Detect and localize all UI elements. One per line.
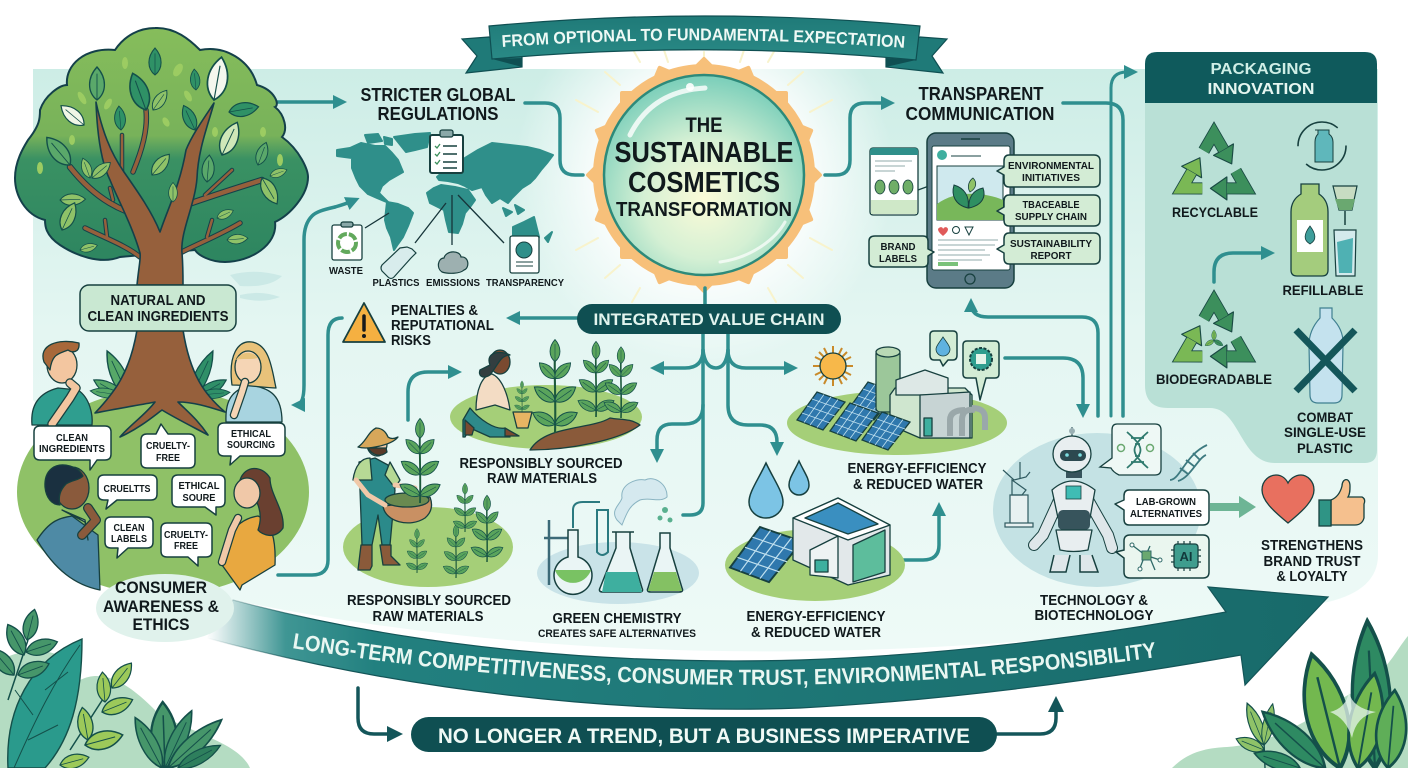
bubble: sustainability report (997, 233, 1100, 264)
caption: GREEN CHEMISTRY (552, 611, 682, 627)
tree leaves (41, 48, 288, 254)
speech bubble: clean ingredients (34, 426, 111, 470)
title: COSMETICS (628, 167, 780, 199)
caption: RAW MATERIALS (372, 609, 484, 625)
biodegradable label: BIODEGRADABLE (1156, 372, 1272, 387)
speech bubble: clean labels: CLEAN (114, 522, 144, 534)
speech bubble: cruelty-free second: FREE (174, 540, 198, 552)
tree crown (15, 28, 308, 262)
person planting (463, 350, 532, 437)
bubble: brand labels: BRAND (880, 241, 916, 253)
bubble: lab-grown: ALTERNATIVES (1130, 508, 1202, 520)
speech bubble: cruelty-free: FREE (156, 452, 180, 464)
bubble: environmental initiatives (997, 155, 1100, 187)
packaging header: INNOVATION (1208, 81, 1314, 98)
small screen (870, 148, 929, 215)
icon: sun (813, 346, 853, 386)
heading: COMMUNICATION (906, 104, 1054, 124)
caption: ENERGY-EFFICIENCY (746, 609, 886, 625)
consumer awareness label: ETHICS (132, 615, 190, 634)
map leader lines (365, 195, 504, 245)
packaging header: PACKAGING (1210, 61, 1312, 78)
person: man in blue sweater (37, 465, 100, 590)
person: woman in yellow (222, 468, 283, 590)
recyclable label: RECYCLABLE (1172, 205, 1258, 220)
bubble: lab-grown: LAB-GROWN (1136, 496, 1196, 508)
speech bubble: clean labels (105, 517, 153, 558)
caption (1034, 593, 1154, 624)
world map (337, 133, 553, 250)
arrow: biodegradable to refillable (1214, 253, 1270, 282)
icon: clipboard checklist (430, 130, 463, 173)
planting scene (450, 340, 642, 487)
building (793, 498, 890, 585)
speech bubble: clean labels: LABELS (111, 533, 147, 545)
bubble: dna (1100, 424, 1161, 475)
icon: emissions (426, 252, 480, 289)
bubble: water (930, 331, 957, 366)
icon: loop bottle (1298, 122, 1346, 170)
label (1261, 538, 1363, 585)
label: natural and clean ingredients: CLEAN INGREDIENTS (88, 309, 229, 325)
icon: transparency (486, 236, 564, 289)
bubble: traceable supply chain (997, 195, 1100, 226)
integrated value chain pill: INTEGRATED VALUE CHAIN (594, 310, 824, 329)
icon: waste (329, 222, 363, 277)
caption: RESPONSIBLY SOURCED (347, 593, 511, 609)
icon: warning (343, 303, 385, 342)
imperative pill with arrows (358, 688, 1056, 752)
connector arrows (276, 72, 1133, 575)
caption: & REDUCED WATER (853, 477, 983, 493)
speech bubble: cruelty-free second: CRUELTY- (164, 529, 208, 541)
heading (906, 84, 1054, 124)
caption: RAW MATERIALS (487, 471, 597, 487)
sun with rays and orb title (514, 0, 894, 365)
speech bubble: cruelts: CRUELTTS (104, 483, 150, 495)
speech bubble: clean ingredients: CLEAN (56, 432, 88, 444)
label: & LOYALTY (1276, 569, 1348, 585)
caption (460, 456, 622, 487)
consumer awareness label: CONSUMER (115, 578, 207, 597)
arrow: lab-grown to trust (1210, 496, 1256, 518)
speech bubble: cruelty-free (141, 424, 195, 468)
packaging header (1145, 52, 1377, 103)
top banner (460, 15, 948, 74)
bubble: brand labels (869, 236, 934, 267)
label: natural and clean ingredients: NATURAL AND (110, 293, 206, 309)
title: SUSTAINABLE (614, 137, 794, 169)
bubble: environmental initiatives: ENVIRONMENTAL (1008, 160, 1095, 172)
caption: ENERGY-EFFICIENCY (848, 461, 987, 477)
bubble: traceable supply chain: TBACEABLE (1022, 199, 1080, 211)
combat label: SINGLE-USE (1284, 425, 1366, 440)
heading (360, 85, 516, 124)
penalties block: PENALTIES & (391, 303, 478, 319)
imperative text: NO LONGER A TREND, BUT A BUSINESS IMPERATIVE (438, 725, 970, 748)
icon: crossed plastic bottle (1296, 308, 1355, 403)
icon: heart (1262, 475, 1314, 523)
person: man in teal shirt (32, 341, 92, 425)
icon: recyclable (1172, 133, 1251, 205)
caption (538, 611, 696, 640)
speech bubble: ethical sourcing (218, 423, 285, 465)
icon: plastics: PLASTICS (372, 277, 420, 289)
panel: technology and biotechnology (993, 424, 1256, 624)
combat label: COMBAT (1297, 410, 1354, 425)
speech bubble: cruelts (98, 475, 157, 509)
person: blonde woman (226, 342, 282, 422)
speech bubble: cruelty-free: CRUELTY- (146, 440, 190, 452)
speech bubble: ethical soure: SOURE (182, 492, 216, 504)
integrated value chain pill (577, 304, 841, 334)
water and building scene (725, 461, 905, 641)
tree trunk and main limbs (96, 102, 214, 285)
icon: emissions: EMISSIONS (426, 277, 480, 289)
speech bubble: clean ingredients: INGREDIENTS (39, 443, 105, 455)
caption (347, 593, 511, 625)
bushes beside trunk (90, 348, 230, 403)
label: natural and clean ingredients (80, 285, 236, 331)
foliage: bottom left (0, 608, 250, 768)
trunk base with roots (95, 330, 225, 437)
panel: consumer awareness (17, 285, 309, 642)
caption: BIOTECHNOLOGY (1034, 608, 1154, 624)
factory scene (787, 331, 1007, 493)
penalties block (343, 303, 494, 349)
icon: biodegradable (1172, 301, 1251, 373)
packaging panel (1145, 52, 1377, 463)
bubble: sustainability report: REPORT (1030, 250, 1072, 262)
panel: stricter regulations (329, 85, 564, 289)
speech bubble: ethical soure: ETHICAL (178, 480, 220, 492)
combat label: PLASTIC (1297, 441, 1353, 456)
title: THE (686, 114, 722, 137)
farmer (353, 428, 432, 570)
combat label (1284, 410, 1366, 456)
icon: transparency: TRANSPARENCY (486, 277, 564, 289)
heading: STRICTER GLOBAL (360, 85, 516, 105)
speech bubble: cruelty-free second (161, 523, 212, 566)
farmer scene (343, 418, 513, 625)
bubble: traceable supply chain: SUPPLY CHAIN (1015, 211, 1087, 223)
icon: thumbs up (1319, 480, 1365, 526)
factory (848, 347, 985, 438)
caption: CREATES SAFE ALTERNATIVES (538, 628, 696, 640)
caption: & REDUCED WATER (751, 625, 881, 641)
banner text: FROM OPTIONAL TO FUNDAMENTAL EXPECTATION (502, 28, 904, 48)
panel: transparent communication (869, 84, 1100, 288)
icon: plastics (372, 247, 420, 289)
steam cloud (615, 479, 667, 525)
icon: water drops (749, 461, 809, 518)
title (614, 114, 794, 221)
brand trust block (1261, 475, 1365, 585)
smartphone (927, 133, 1014, 288)
caption (848, 461, 987, 493)
long-term arrow band (209, 586, 1330, 710)
icon: dna strand (1170, 445, 1207, 481)
bubble: molecule and AI chip (1116, 535, 1209, 578)
penalties block: REPUTATIONAL (391, 318, 494, 334)
page background panel (33, 69, 1378, 651)
refillable label: REFILLABLE (1282, 283, 1364, 298)
green chemistry scene (537, 479, 699, 640)
penalties block: RISKS (391, 333, 431, 349)
pale clouds beside trunk (230, 272, 282, 301)
bubble: sustainability report: SUSTAINABILITY (1010, 238, 1092, 250)
icon: refillable bottle (1291, 184, 1357, 276)
foliage: bottom right (1172, 620, 1408, 768)
bubble: chip (963, 341, 999, 400)
speech bubble: ethical soure (172, 475, 225, 515)
caption (746, 609, 886, 641)
lab machine (1003, 462, 1033, 527)
icon: waste: WASTE (329, 265, 363, 277)
flasks (544, 502, 683, 594)
tree branches (70, 110, 262, 257)
heading: REGULATIONS (378, 104, 498, 124)
label: STRENGTHENS (1261, 538, 1363, 554)
consumer awareness label (96, 574, 234, 642)
caption: TECHNOLOGY & (1040, 593, 1148, 609)
speech bubble: ethical sourcing: ETHICAL (231, 428, 272, 440)
heading: TRANSPARENT (918, 84, 1044, 104)
label: BRAND TRUST (1264, 554, 1361, 570)
bubble: brand labels: LABELS (879, 253, 917, 265)
title: TRANSFORMATION (616, 199, 792, 221)
consumer awareness label: AWARENESS & (103, 597, 219, 616)
panel: tree (15, 28, 308, 340)
bubble: environmental initiatives: INITIATIVES (1022, 172, 1080, 184)
band text: LONG-TERM COMPETITIVENESS, CONSUMER TRUST, ENVIRONMENTAL RESPONSIBILITY (293, 633, 1154, 688)
caption: RESPONSIBLY SOURCED (460, 456, 622, 472)
speech bubble: ethical sourcing: SOURCING (227, 439, 275, 451)
bubble: molecule and AI chip: AI (1180, 549, 1192, 564)
bubble: lab-grown (1115, 490, 1209, 525)
robot (1034, 427, 1112, 572)
